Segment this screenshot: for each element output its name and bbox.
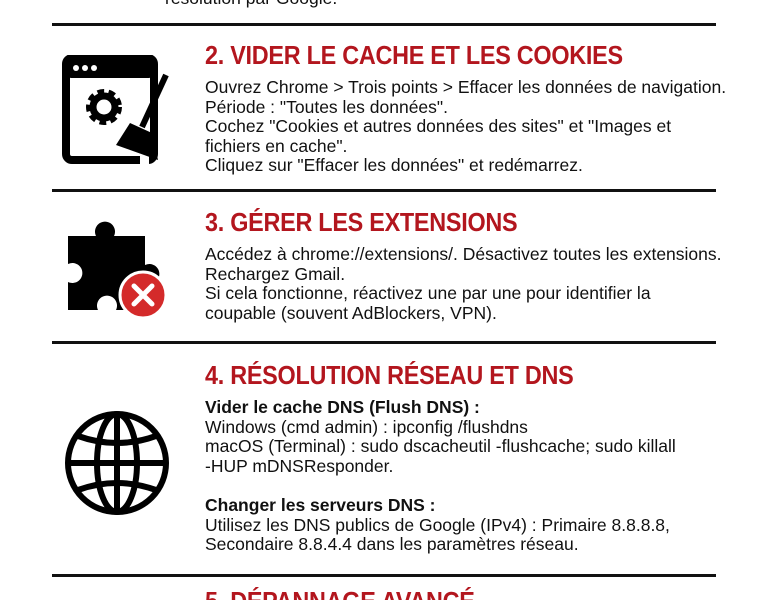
text: section 3 body: Accédez à chrome://extensions/. Désactivez toutes les extensions.	[205, 244, 722, 264]
text: section 4 body	[205, 397, 676, 554]
icon: globe	[65, 411, 169, 515]
text: section 4 body: macOS (Terminal) : sudo dscacheutil -flushcache; sudo killall	[205, 436, 676, 456]
title: section 2: 2. VIDER LE CACHE ET LES COOKIES	[205, 40, 623, 70]
text: section 3 body: Si cela fonctionne, réactivez une par une pour identifier la	[205, 283, 651, 303]
text: section 3 body	[205, 244, 722, 323]
icon: browser with gear and brush	[62, 55, 169, 164]
text: section 4 body: Changer les serveurs DNS :	[205, 495, 436, 515]
text: section 2 body	[205, 77, 726, 175]
text: section 4 body: Vider le cache DNS (Flush DNS) :	[205, 397, 480, 417]
text: section 2 body: Ouvrez Chrome > Trois points > Effacer les données de navigation.	[205, 77, 726, 97]
text: section 4 body: -HUP mDNSResponder.	[205, 456, 393, 476]
icon: puzzle with red x	[68, 222, 164, 316]
title: section 3: 3. GÉRER LES EXTENSIONS	[205, 207, 517, 237]
title: section 4: 4. RÉSOLUTION RÉSEAU ET DNS	[205, 360, 573, 390]
text: section 4 body: Windows (cmd admin) : ipconfig /flushdns	[205, 417, 528, 437]
text: section 4 body: Utilisez les DNS publics de Google (IPv4) : Primaire 8.8.8.8,	[205, 515, 670, 535]
text: section 4 body: Secondaire 8.8.4.4 dans les paramètres réseau.	[205, 534, 579, 554]
text: section 3 body: coupable (souvent AdBlockers, VPN).	[205, 303, 497, 323]
text: section 2 body: Période : "Toutes les données".	[205, 97, 448, 117]
text: section 3 body: Rechargez Gmail.	[205, 264, 345, 284]
text: section 2 body: Cochez "Cookies et autres données des sites" et "Images et	[205, 116, 671, 136]
text: section 2 body: fichiers en cache".	[205, 136, 347, 156]
text: section 2 body: Cliquez sur "Effacer les données" et redémarrez.	[205, 155, 583, 175]
